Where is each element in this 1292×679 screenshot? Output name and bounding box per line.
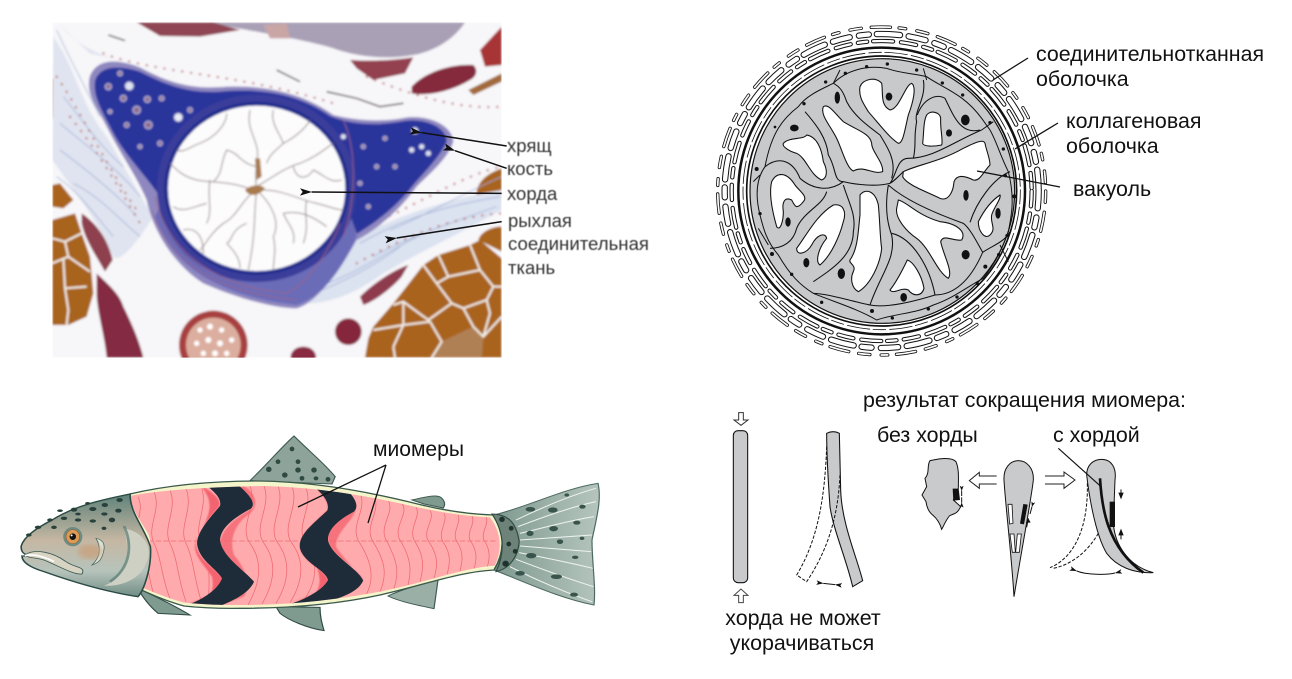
anal fin (388, 580, 438, 609)
peripheral thin cell layer (753, 67, 1012, 320)
head spots (26, 498, 123, 537)
labels: cross-section: оболочка (1066, 134, 1159, 158)
tail peduncle (492, 514, 519, 572)
pectoral fin (138, 588, 190, 615)
labels: photo tissue names: рыхлая (508, 210, 572, 231)
notochord interior (168, 106, 345, 271)
adipose fin (412, 496, 445, 508)
dark fissures (108, 35, 403, 107)
collagen sheath rings (738, 48, 1025, 334)
dorsal fin (250, 436, 335, 484)
vacuoles (771, 79, 1000, 295)
labels: bending diagrams: результат сокращения миомера: (863, 388, 1186, 412)
labels: photo tissue names (507, 135, 649, 278)
left muscle block (52, 213, 93, 325)
fish section without notochord (922, 458, 962, 529)
arrow: to the right (1045, 472, 1075, 488)
panel: trout with myomeres (21, 436, 599, 631)
cell walls (765, 80, 1012, 305)
body outline (130, 481, 502, 608)
lower-right muscle block (365, 240, 502, 358)
lower nerve bundle (178, 309, 249, 358)
labels: cross-section: коллагеновая (1066, 109, 1201, 133)
labels: bending diagrams: хорда не может (725, 606, 881, 630)
connective tissue (52, 25, 502, 303)
tail fin (494, 483, 599, 605)
leader lines: cross-section (977, 58, 1060, 187)
connective tissue sheath (718, 27, 1046, 355)
labels: photo tissue names: кость (507, 158, 553, 179)
pelvic fin (276, 607, 324, 631)
panel: histology photo of notochord (52, 22, 507, 379)
fish section at rest (1004, 461, 1033, 597)
panel: notochord cross-section diagram (718, 27, 1046, 355)
labels: bending diagrams (725, 388, 1186, 655)
label: myomeres: миомеры (373, 437, 464, 461)
labels: cross-section: оболочка (1036, 67, 1129, 91)
head (21, 494, 151, 597)
photo arrows (312, 133, 507, 238)
eye (63, 527, 82, 546)
fish section with notochord (1050, 448, 1153, 574)
leader lines: myomeres (298, 465, 386, 523)
saturated edges next to dark bands (188, 486, 363, 605)
labels: cross-section: вакуоль (1073, 177, 1151, 201)
labels: bending diagrams: без хорды (877, 423, 978, 447)
flesh and myomeres (130, 486, 500, 605)
notochord cell network (170, 110, 343, 270)
arrow: to the left (969, 472, 997, 488)
bent notochord rod (797, 432, 863, 587)
blue cartilage and sheath (89, 62, 453, 308)
labels: bending diagrams: укорачиваться (730, 631, 874, 655)
labels: bending diagrams: с хордой (1053, 423, 1140, 447)
cell nuclei (755, 62, 1016, 320)
notochord grey core (750, 59, 1015, 323)
labels: photo tissue names: ткань (508, 257, 555, 278)
labels: photo tissue names: хорда (507, 183, 558, 204)
dark septa bands (182, 485, 363, 607)
straight notochord rod (733, 413, 748, 603)
myomere wave lines (137, 486, 496, 605)
labels: cross-section: соединительнотканная (1036, 42, 1264, 66)
left muscle (52, 183, 73, 208)
panel: notochord bending diagrams (733, 413, 1153, 603)
cartilage cells (105, 71, 431, 209)
labels: photo tissue names: соединительная (508, 233, 649, 254)
labels: photo tissue names: хрящ (507, 135, 552, 156)
labels: cross-section (1036, 42, 1264, 201)
